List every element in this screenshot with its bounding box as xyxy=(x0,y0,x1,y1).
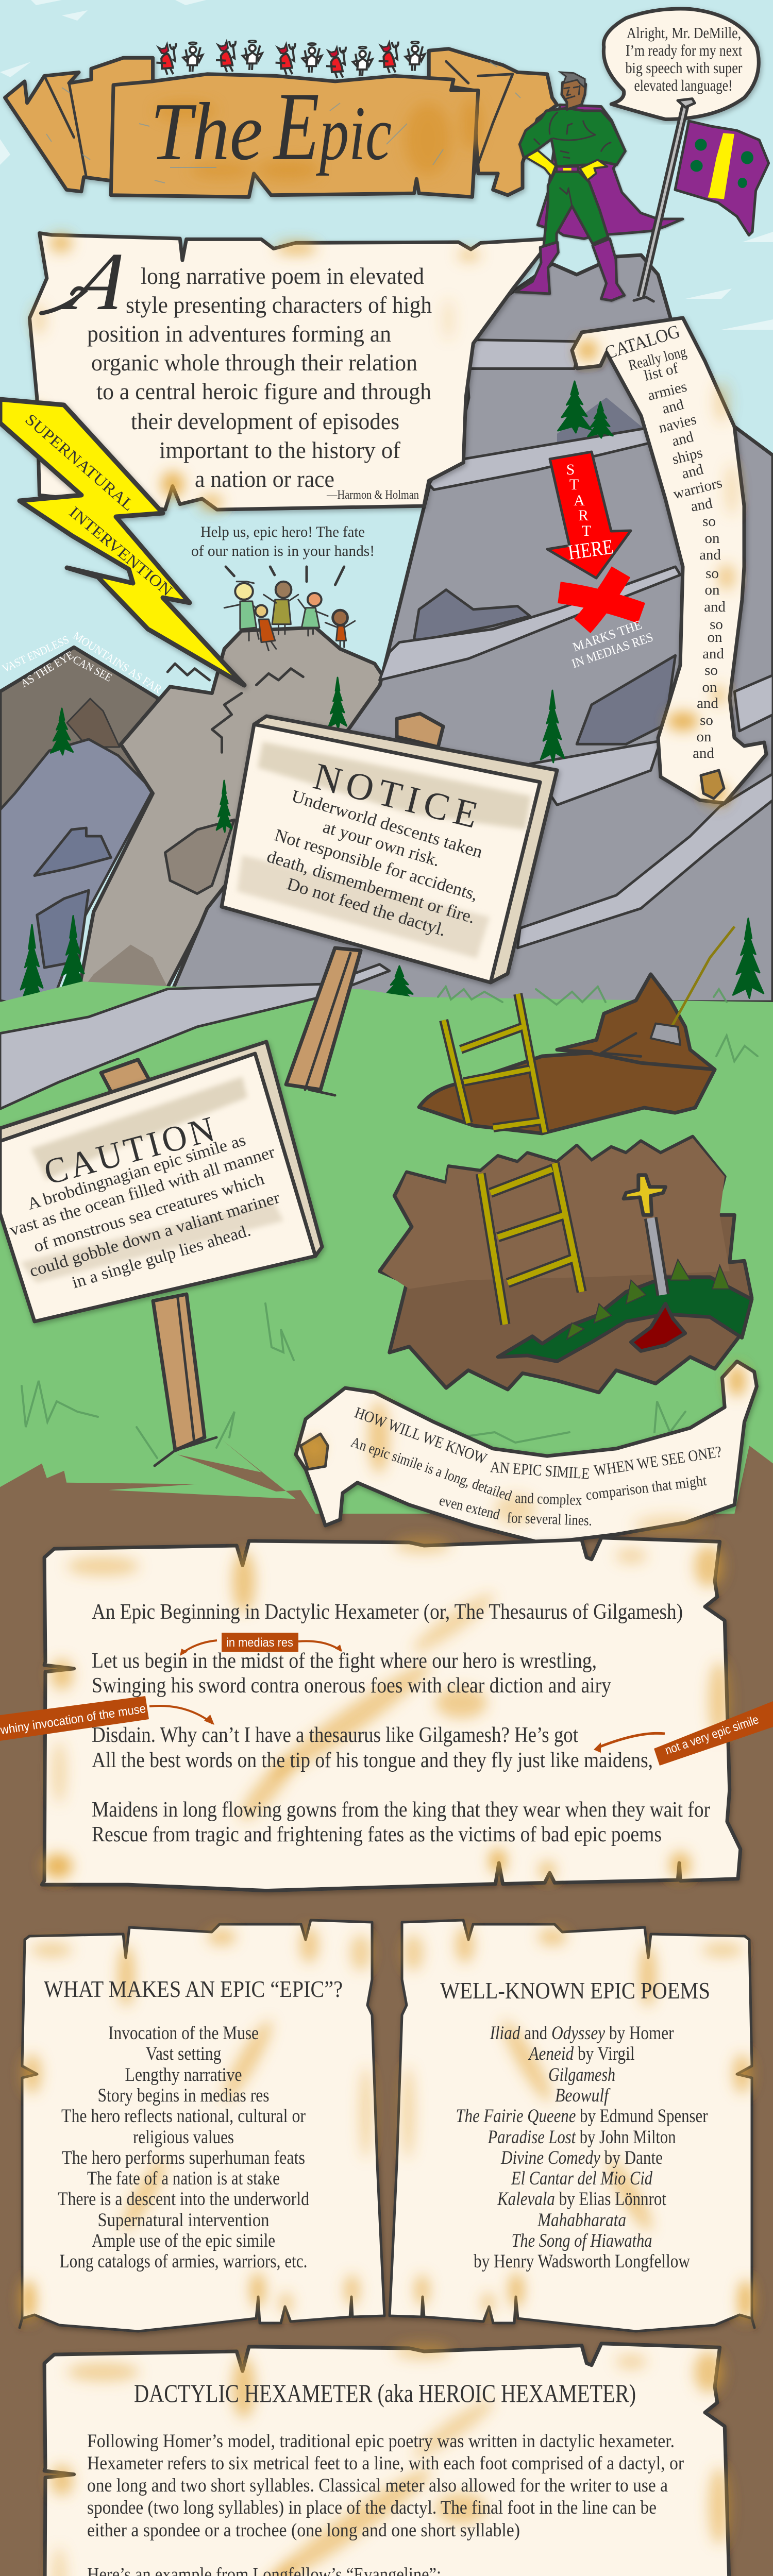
annotation: in medias res: in medias res xyxy=(226,1636,293,1650)
annotation: whiny invocation of the muse xyxy=(0,1696,214,1741)
caution sign post xyxy=(153,1294,216,1466)
intro definition text: important to the history of xyxy=(159,437,401,463)
flag stripe xyxy=(708,133,734,199)
second dug hole with ladder, sword and dragon xyxy=(380,1137,752,1393)
notice sign text: Not responsible for accidents, xyxy=(272,825,480,905)
catalog scroll text: so xyxy=(704,662,718,679)
hair xyxy=(560,72,585,88)
catalog scroll text: on xyxy=(705,582,720,598)
intro definition text: position in adventures forming an xyxy=(87,320,391,347)
first dug hole with ladder xyxy=(419,926,734,1133)
marks the in medias res caption: IN MEDIAS RES xyxy=(570,630,655,671)
vast endless mountains caption: CAN SEE xyxy=(71,653,114,684)
catalog scroll text: and xyxy=(697,695,718,711)
intro definition text: to a central heroic figure and through xyxy=(96,378,431,404)
catalog scroll text: and xyxy=(661,396,685,417)
notice sign post xyxy=(286,714,443,1095)
flag on pole xyxy=(634,99,769,301)
notice sign text: at your own risk. xyxy=(321,817,442,870)
grass tufts xyxy=(22,987,758,1458)
scroll text: An epic simile is a long, detailed xyxy=(349,1434,514,1504)
drop cap: A xyxy=(55,236,144,327)
what makes an epic list: The fate of a nation is at stake xyxy=(87,2168,280,2189)
what makes an epic list: Vast setting xyxy=(145,2043,222,2064)
catalog scroll xyxy=(572,318,766,805)
scroll text: AN EPIC SIMILE xyxy=(490,1458,590,1483)
caution sign stub xyxy=(101,1060,150,1106)
catalog scroll text: and xyxy=(690,495,714,515)
ladder one xyxy=(444,994,545,1132)
sign wood grain xyxy=(21,1077,283,1283)
scroll text: and complex xyxy=(515,1490,582,1509)
notice sign text: Do not feed the dactyl. xyxy=(284,874,448,940)
villager 2 xyxy=(256,605,276,651)
start here arrow: R xyxy=(578,507,589,524)
dactylic hexameter text: DACTYLIC HEXAMETER (aka HEROIC HEXAMETER) xyxy=(134,2379,636,2408)
road lower bands xyxy=(380,567,773,948)
start here arrow: T xyxy=(569,476,579,493)
poem text: Let us begin in the midst of the fight where our hero is wrestling, xyxy=(92,1649,597,1673)
catalog scroll text: and xyxy=(702,646,724,662)
big central mountain xyxy=(167,255,773,1002)
scroll text: for several lines. xyxy=(507,1510,592,1529)
villager 4 xyxy=(298,593,328,636)
villagers' plea xyxy=(191,523,375,560)
villager 3 xyxy=(264,582,298,634)
caution sign text: CAUTION xyxy=(40,1108,222,1193)
catalog scroll text: and xyxy=(680,461,705,482)
what makes an epic list: Ample use of the epic simile xyxy=(92,2230,275,2251)
what makes an epic list: Supernatural intervention xyxy=(98,2210,269,2231)
well-known epic poems list: Kalevala by Elias Lönnrot xyxy=(497,2189,667,2210)
mountain: brown outcrop xyxy=(67,699,120,747)
notice sign text: NOTICE xyxy=(309,755,482,837)
scattered fir trees xyxy=(18,381,764,1018)
catalog scroll text: and xyxy=(704,599,726,615)
well-known epic poems list: Aeneid by Virgil xyxy=(528,2043,635,2064)
what makes an epic list: There is a descent into the underworld xyxy=(58,2189,309,2210)
dactylic hexameter text xyxy=(87,2379,684,2576)
scroll text: even extend xyxy=(438,1492,502,1523)
legs xyxy=(544,172,608,246)
poem text: Rescue from tragic and frightening fates as the victims of bad epic poems xyxy=(92,1823,662,1846)
blood xyxy=(631,1303,685,1351)
title text: The xyxy=(150,86,263,177)
start here arrow xyxy=(547,452,631,578)
what makes an epic list: Invocation of the Muse xyxy=(108,2023,259,2044)
villager 1 xyxy=(224,582,261,641)
what makes an epic list: The hero performs superhuman feats xyxy=(62,2147,305,2168)
torso xyxy=(519,108,625,166)
dactylic hexameter text: Following Homer’s model, traditional epic poetry was written in dactylic hexameter. xyxy=(87,2431,675,2452)
speech bubble text: Alright, Mr. DeMille, xyxy=(627,24,741,42)
scroll stains xyxy=(577,340,738,805)
intro definition text: —Harmon & Holman xyxy=(326,488,419,502)
title text: Epic xyxy=(273,73,392,181)
dactylic hexameter text: either a spondee or a trochee (one long and one short syllable) xyxy=(87,2520,520,2541)
mountain: taupe peak with people xyxy=(79,628,384,994)
belt xyxy=(557,166,578,172)
notice sign text: death, dismemberment or fire. xyxy=(265,847,477,927)
dragon spines xyxy=(567,1259,730,1339)
well-known epic poems list: by Henry Wadsworth Longfellow xyxy=(474,2251,690,2272)
banner center xyxy=(111,74,478,197)
poem text: An Epic Beginning in Dactylic Hexameter (or, The Thesaurus of Gilgamesh) xyxy=(92,1600,683,1624)
villagers' plea: of our nation is in your hands! xyxy=(191,543,375,560)
gloves xyxy=(526,150,607,180)
sign face xyxy=(0,1054,315,1321)
catalog scroll text: so xyxy=(705,565,719,582)
villager 5 xyxy=(325,610,355,647)
well-known epic poems list: The Song of Hiawatha xyxy=(511,2230,652,2251)
dragon xyxy=(498,1277,752,1361)
catalog scroll text: and xyxy=(693,745,714,761)
what makes an epic list: Long catalogs of armies, warriors, etc. xyxy=(60,2251,307,2272)
well-known epic poems list: Iliad and Odyssey by Homer xyxy=(490,2023,674,2044)
dirt pile xyxy=(557,974,715,1070)
villagers on the peak xyxy=(224,567,355,651)
well-known epic poems list: Beowulf xyxy=(555,2085,611,2106)
intro definition text: organic whole through their relation xyxy=(91,349,417,376)
shout lines xyxy=(226,567,344,585)
scroll text: comparison that might xyxy=(585,1472,708,1503)
poem text: Disdain. Why can’t I have a thesaurus like Gilgamesh? He’s got xyxy=(92,1723,578,1747)
hero with cape xyxy=(515,72,683,300)
what makes an epic list xyxy=(44,1976,343,2272)
panel: well-known epic poems xyxy=(390,1920,754,2331)
well-known epic poems list: Paradise Lost by John Milton xyxy=(488,2127,676,2148)
scroll roll end xyxy=(701,770,724,799)
rock shadow upper xyxy=(557,398,646,446)
annotation: in medias res xyxy=(180,1633,342,1656)
bolt text: INTERVENTION xyxy=(66,503,176,600)
intro definition text: a nation or race xyxy=(195,466,334,492)
what makes an epic list: WHAT MAKES AN EPIC “EPIC”? xyxy=(44,1976,343,2002)
speech bubble text: I’m ready for my next xyxy=(626,41,742,59)
pole xyxy=(641,105,685,297)
intro definition text: style presenting characters of high xyxy=(126,292,432,318)
catalog scroll text: on xyxy=(705,530,720,547)
vast endless mountains caption: AS THE EYE xyxy=(18,648,76,690)
mountain roads xyxy=(380,340,773,948)
intro definition text: their development of episodes xyxy=(131,408,399,434)
banner right rolls xyxy=(429,49,557,195)
catalog scroll text: ships xyxy=(670,445,704,468)
marks the in medias res caption: MARKS THE xyxy=(571,618,644,654)
road upper bands xyxy=(429,340,651,490)
sign face xyxy=(222,724,540,982)
poem text: Maidens in long flowing gowns from the king that they wear when they wait for xyxy=(92,1798,710,1822)
dactylic hexameter text: spondee (two long syllables) in place of the dactyl. The final foot in the line can be xyxy=(87,2497,657,2518)
poem text xyxy=(92,1600,710,1846)
flag dots xyxy=(691,139,753,188)
wood grain xyxy=(237,742,531,958)
road on grass xyxy=(0,964,390,1109)
annotation: whiny invocation of the muse: whiny invocation of the muse xyxy=(0,1702,147,1737)
shovel xyxy=(651,926,734,1045)
notice sign xyxy=(222,716,557,982)
catalog scroll text: and xyxy=(670,429,695,450)
speech bubble text: big speech with super xyxy=(626,59,743,77)
ladder two xyxy=(481,1163,582,1325)
mountain: blue-grey xyxy=(0,739,153,1010)
title banner xyxy=(5,49,557,197)
banner left rolls xyxy=(5,49,557,197)
dactylic hexameter text: Hexameter refers to six metrical feet to a line, with each foot comprised of a dactyl, or xyxy=(87,2453,684,2474)
bolt text: SUPERNATURAL xyxy=(22,410,138,514)
start here arrow: T xyxy=(582,522,591,539)
caution sign text: in a single gulp lies ahead. xyxy=(70,1221,253,1292)
flag cloth xyxy=(675,121,769,235)
bolt text xyxy=(22,410,176,600)
title text xyxy=(150,73,392,181)
intro definition text: long narrative poem in elevated xyxy=(141,263,424,289)
speech bubble text xyxy=(626,24,743,94)
speech bubble: hero xyxy=(603,9,759,119)
notice sign text: Underworld descents taken xyxy=(289,787,485,862)
vast endless mountains caption xyxy=(0,629,164,696)
caution sign text: could gobble down a valiant mariner xyxy=(27,1189,282,1281)
well-known epic poems list xyxy=(440,1977,710,2272)
villagers' plea: Help us, epic hero! The fate xyxy=(200,523,365,540)
panel: dactylic hexameter xyxy=(42,2344,741,2576)
lightning bolt: supernatural intervention xyxy=(0,399,244,685)
catalog scroll text: CATALOG xyxy=(602,320,682,363)
what makes an epic list: The hero reflects national, cultural or xyxy=(61,2106,306,2127)
caution sign xyxy=(0,1042,322,1321)
what makes an epic list: religious values xyxy=(133,2127,234,2148)
poem parchment xyxy=(42,1538,741,1891)
speech bubble text: elevated language! xyxy=(634,76,733,94)
catalog scroll text: armies xyxy=(646,378,688,404)
devils and angels on the banner xyxy=(156,41,425,78)
banner flecks xyxy=(46,62,520,183)
start here arrow: HERE xyxy=(566,534,615,564)
vast endless mountains caption: MOUNTAINS AS FAR xyxy=(71,629,164,696)
brown ground with spiky grass edge xyxy=(0,1440,773,2576)
catalog scroll text: on xyxy=(707,629,722,646)
pit xyxy=(380,1137,752,1393)
well-known epic poems list: The Fairie Queene by Edmund Spenser xyxy=(456,2106,708,2127)
what makes an epic list: Story begins in medias res xyxy=(98,2085,269,2106)
intro definition text xyxy=(41,236,432,502)
catalog scroll text: on xyxy=(697,728,712,745)
well-known epic poems list: WELL-KNOWN EPIC POEMS xyxy=(440,1977,710,2004)
face xyxy=(564,86,580,99)
mountain: far brown ridge xyxy=(0,647,158,817)
catalog scroll text: on xyxy=(702,679,717,696)
scroll text: WHEN WE SEE ONE? xyxy=(593,1443,723,1480)
well-known epic poems list: Mahabharata xyxy=(537,2210,626,2231)
catalog scroll text: so xyxy=(702,513,716,530)
panel: what makes an epic epic xyxy=(20,1920,384,2331)
red x marks the spot xyxy=(559,572,642,626)
grass ground xyxy=(0,981,773,1530)
sky background xyxy=(0,0,773,1030)
catalog scroll text: list of xyxy=(643,360,680,384)
annotation: not a very epic simile xyxy=(594,1701,773,1766)
catalog scroll text: navies xyxy=(657,411,698,436)
vast endless mountains caption: VAST ENDLESS xyxy=(0,633,71,675)
well-known epic poems list: Divine Comedy by Dante xyxy=(500,2147,663,2168)
catalog scroll text: so xyxy=(710,616,723,633)
sign top edge and side xyxy=(254,716,557,982)
boots xyxy=(515,239,625,300)
caution sign text: A brobdingnagian epic simile as xyxy=(25,1131,248,1214)
sword xyxy=(651,1218,663,1295)
banner stains xyxy=(155,98,482,180)
intro definition parchment xyxy=(29,233,552,510)
scroll: how will we know an epic simile xyxy=(296,1361,757,1543)
scroll stains xyxy=(307,1365,745,1535)
burn stains xyxy=(31,234,480,510)
sky brush strokes xyxy=(0,0,773,330)
rock shadows xyxy=(414,590,676,744)
catalog scroll text: warriors xyxy=(671,474,724,502)
muscle lines xyxy=(534,112,611,206)
cape xyxy=(537,105,683,239)
catalog scroll text: and xyxy=(699,547,721,563)
catalog scroll text: Really long xyxy=(627,344,688,374)
pit upper wall xyxy=(382,1138,730,1289)
sign top edge xyxy=(0,1042,322,1256)
notice sign text xyxy=(265,755,485,940)
head xyxy=(562,79,586,110)
what makes an epic list: Lengthy narrative xyxy=(125,2064,242,2086)
poem text: All the best words on the tip of his tongue and they fly just like maidens, xyxy=(92,1749,653,1772)
caution sign text: of monstrous sea creatures which xyxy=(31,1170,266,1256)
well-known epic poems list: El Cantar del Mio Cid xyxy=(511,2168,652,2189)
catalog scroll text xyxy=(602,320,726,761)
caution sign text: vast as the ocean filled with all manner xyxy=(8,1143,277,1240)
start here arrow: A xyxy=(574,492,585,509)
poem text: Swinging his sword contra onerous foes with clear diction and airy xyxy=(92,1674,611,1698)
start here arrow: S xyxy=(566,461,575,478)
scroll text xyxy=(349,1403,723,1529)
caution sign text xyxy=(8,1108,282,1292)
dactylic hexameter text: one long and two short syllables. Classical meter also allowed for the writer to use a xyxy=(87,2475,668,2496)
pit xyxy=(419,1051,715,1133)
catalog scroll text: so xyxy=(700,712,713,728)
scroll text: HOW WILL WE KNOW xyxy=(352,1403,490,1468)
well-known epic poems list: Gilgamesh xyxy=(548,2064,615,2086)
left mountains xyxy=(0,647,158,1010)
